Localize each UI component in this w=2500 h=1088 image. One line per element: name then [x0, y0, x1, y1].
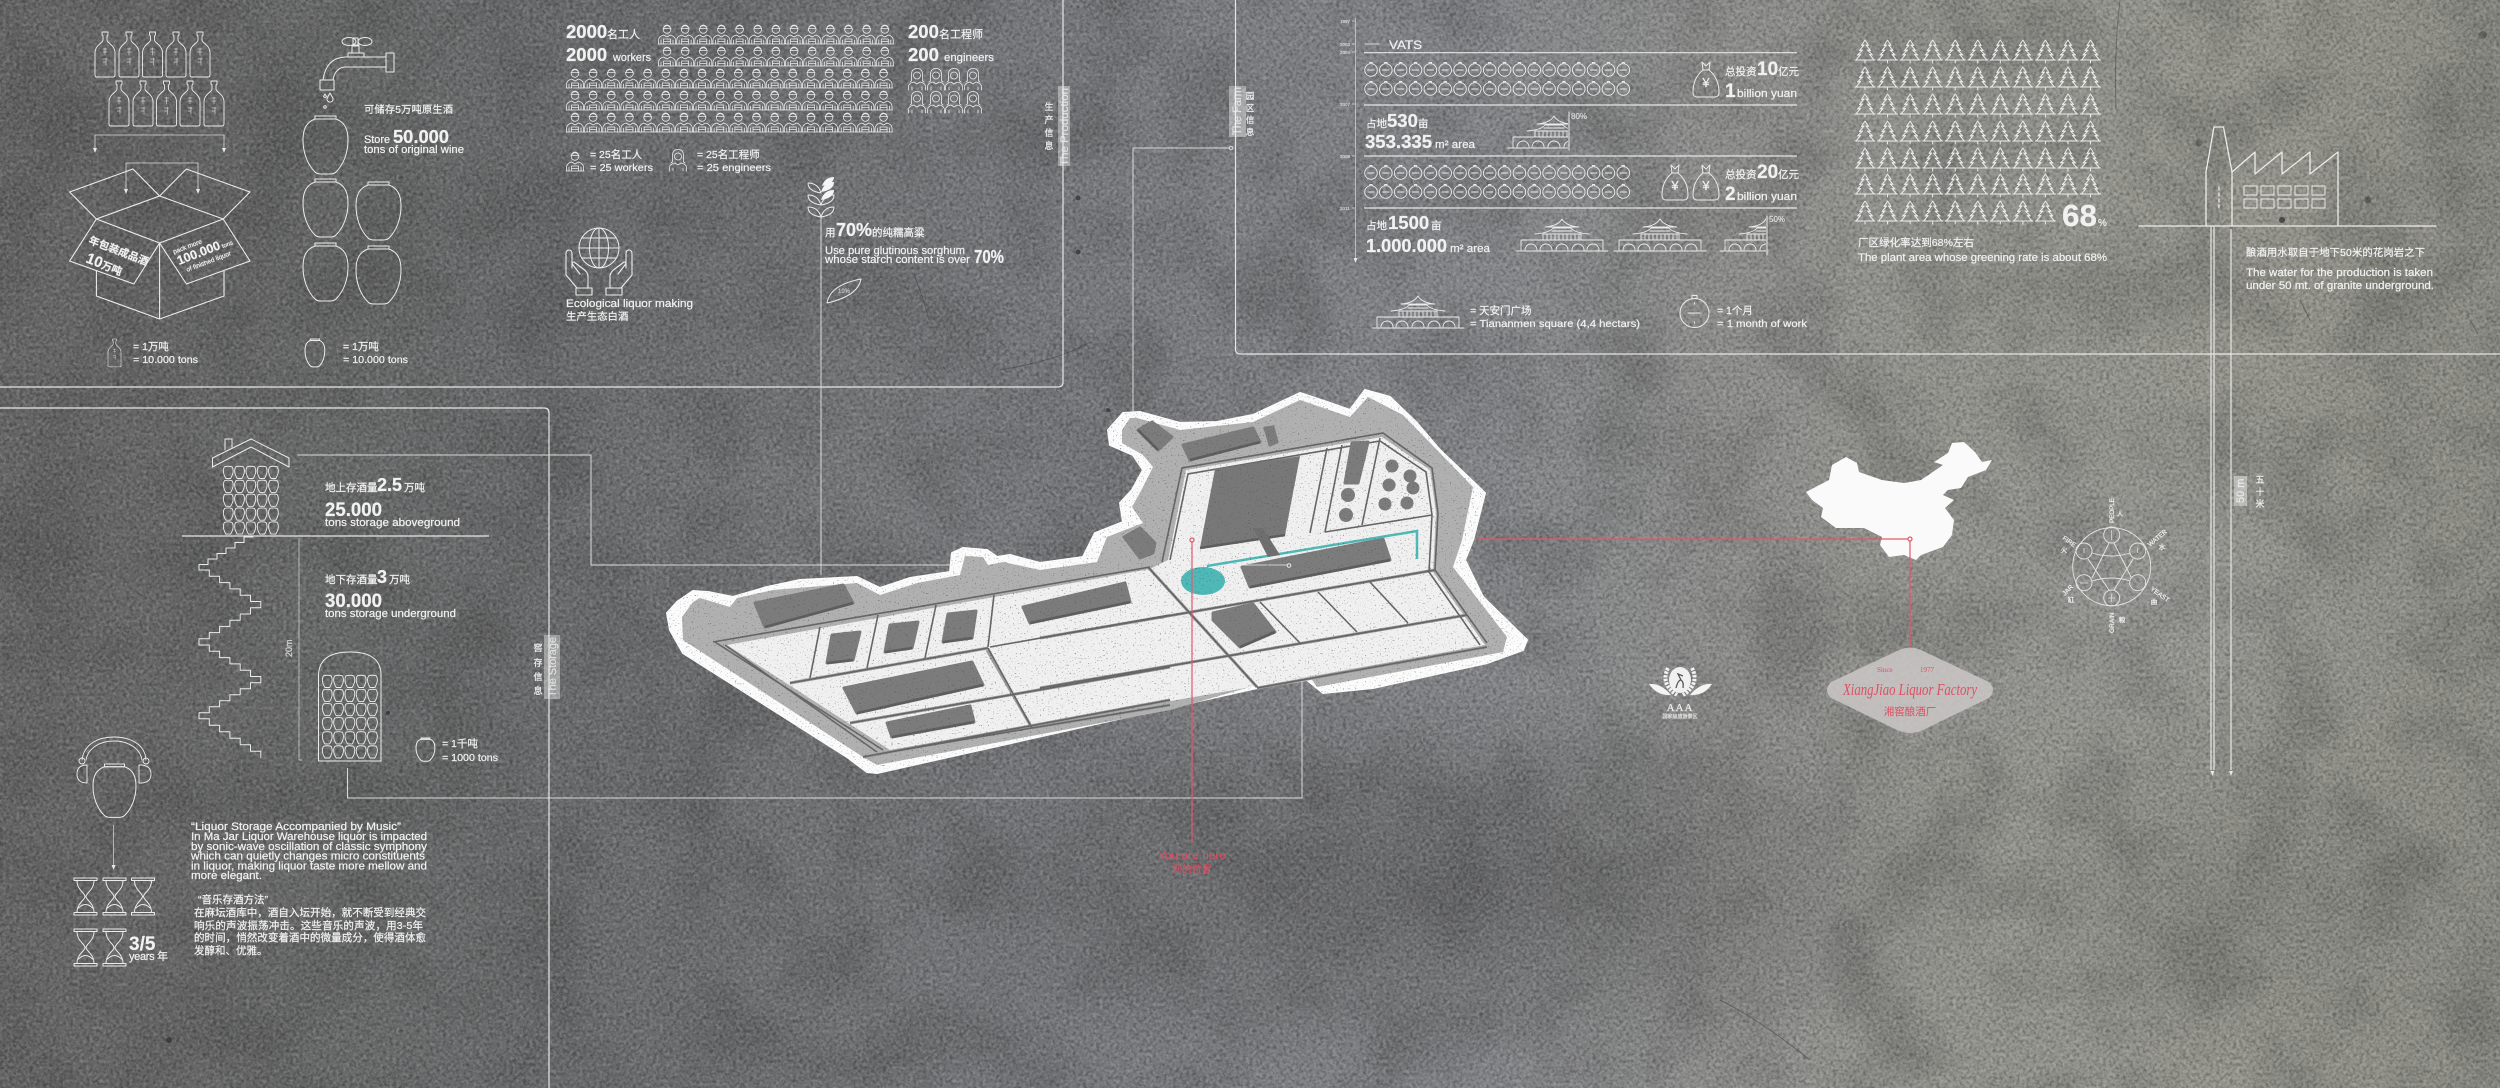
- panel: music storage: [74, 737, 428, 966]
- timeline axis: 2007: [1340, 102, 1351, 107]
- icon: two money bags: [1662, 165, 1719, 200]
- text: underground: tons storage underground: [325, 608, 456, 620]
- text: store 50.000: tons of original wine: [364, 144, 464, 156]
- text: music english: [190, 821, 428, 882]
- legend: bottle: = 1万吨: [133, 340, 169, 353]
- legend: jar: = 10.000 tons: [343, 354, 408, 366]
- timeline axis: 2003: [1340, 42, 1351, 47]
- text: vats: [1365, 38, 1422, 52]
- text: underground: 30.000: [325, 591, 382, 612]
- dimension: 20m: [284, 538, 302, 760]
- diagram: five elements wheel: WATER: [2147, 528, 2169, 549]
- text: sorghum 70%: 70%: [836, 220, 872, 240]
- ground line: [182, 535, 489, 537]
- map detail marker: [1242, 564, 1291, 567]
- tag: 50 m: [2234, 475, 2265, 509]
- tag: the storage: [533, 635, 560, 699]
- tag: the production: [1044, 86, 1071, 166]
- text: annual packing en: 100.000 tons: [175, 234, 234, 268]
- legend: month of work: = 1 month of work: [1717, 318, 1808, 330]
- text: music chinese: 发醇和、优雅。: [194, 944, 268, 957]
- legend: engineers: = 25 engineers: [697, 162, 771, 174]
- text: area 1500: 占地: [1366, 219, 1388, 232]
- icon: hourglasses: [74, 878, 154, 966]
- you are here marker: You are here: [1158, 850, 1226, 862]
- text: annual packing cn: [84, 234, 151, 279]
- legend: month of work: = 1个月: [1717, 305, 1753, 317]
- text: 2 billion: 2: [1725, 184, 1736, 205]
- text: 3/5 years: [129, 934, 168, 963]
- text: music chinese: [194, 893, 426, 957]
- red location connector: [1477, 537, 1912, 647]
- text: 1 billion: billion yuan: [1737, 88, 1797, 100]
- map buildings: [755, 422, 1420, 737]
- icon: tiananmen 80%: 80%: [1571, 112, 1587, 121]
- text: greening rate: 厂区绿化率达到68%左右: [1858, 236, 1974, 249]
- text: 200 engineers: 200: [908, 44, 939, 65]
- panel: workforce: [566, 21, 995, 174]
- diagram: five elements wheel: 粮: [2119, 615, 2126, 624]
- diagram: five elements wheel: GRAIN: [2109, 612, 2116, 633]
- text: 1 billion: 总投资: [1725, 65, 1756, 78]
- badge: AAA scenic area: AAA: [1667, 702, 1693, 714]
- panel: original wine storage: [303, 38, 464, 367]
- text: area 530: 亩: [1418, 117, 1428, 130]
- text: 2000 workers: 2000: [566, 21, 607, 42]
- tag: 50 m: 米: [2255, 498, 2265, 509]
- text: sorghum 70%: Use pure glutinous sorghum: [825, 245, 965, 257]
- text: 1 billion: [1725, 59, 1800, 102]
- diagram: five elements wheel: PEOPLE: [2109, 497, 2116, 523]
- icon: tiananmen 2.5: [1516, 215, 1812, 255]
- text: 1 billion: 1: [1725, 81, 1736, 102]
- arrow: to hourglasses: [112, 825, 116, 870]
- text: aboveground: 万吨: [404, 481, 425, 494]
- chart: engineer pictogram: [908, 68, 982, 113]
- legend: workers: = 25 workers: [590, 162, 653, 174]
- text: underground: 万吨: [389, 573, 410, 586]
- text: area 530: [1365, 110, 1476, 152]
- chart: trees 68 percent: [1855, 40, 2100, 224]
- dimension: 20m: 20m: [284, 639, 294, 657]
- icon: two money bags: ¥: [1701, 178, 1710, 193]
- legend: jar: = 1万吨: [343, 340, 379, 353]
- text: area 1500: 1.000.000: [1366, 235, 1447, 256]
- diagram: five elements wheel: 人: [2117, 510, 2124, 518]
- text: water source: The water for the production is taken: [2246, 267, 2433, 279]
- map plot area: [727, 437, 1485, 750]
- tag: the farm: 信: [1246, 115, 1255, 125]
- text: underground: 3: [377, 567, 387, 587]
- text: music english: which can quietly changes micro constituents: [190, 850, 426, 862]
- text: 200 engineers: 名工程师: [939, 27, 983, 41]
- text: music chinese: 在麻坛酒库中，酒自入坛开始，就不断受到经典交: [194, 906, 426, 919]
- legend: bottle: = 10.000 tons: [133, 354, 198, 366]
- text: aboveground: 25.000: [325, 500, 382, 521]
- legend: jar: [305, 339, 408, 367]
- diagram: five elements wheel: FIRE: [2061, 535, 2078, 550]
- text: 2000 workers: 名工人: [607, 27, 640, 41]
- map teal water: [1181, 531, 1417, 595]
- text: music english: by sonic-wave oscillation of classic symphony: [191, 841, 428, 853]
- legend: tiananmen: = Tiananmen square (4,4 hectars): [1470, 318, 1640, 330]
- badge: AAA scenic area: [1649, 667, 1712, 720]
- icon: leaf 10%: [827, 279, 861, 303]
- legend: 1000 tons: = 1000 tons: [442, 752, 498, 764]
- text: area 1500: [1366, 212, 1491, 256]
- tag: the production: 生: [1044, 101, 1054, 112]
- tag: the storage: 存: [533, 657, 543, 668]
- panel: storage: [182, 439, 498, 764]
- text: music chinese: 的时间，悄然改变着酒中的微量成分，使得酒体愈: [194, 931, 426, 944]
- text: 2000 workers: [566, 21, 651, 65]
- text: 3/5 years: years 年: [129, 949, 168, 963]
- text: area 1500: 1500: [1388, 212, 1429, 233]
- tag: the storage: 息: [533, 685, 543, 696]
- tag: the storage: The Storage: [547, 637, 559, 697]
- icon: money bag: ¥: [1701, 75, 1710, 90]
- tag: the farm: 园: [1246, 91, 1254, 101]
- text: water source: under 50 mt. of granite underground.: [2246, 280, 2434, 292]
- text: 68 percent: 68: [2062, 198, 2097, 233]
- text: 68 percent: %: [2098, 218, 2107, 229]
- text: music english: “Liquor Storage Accompanied by Music”: [191, 821, 401, 833]
- text: annual packing en: pack more: [172, 238, 203, 256]
- text: greening rate: [1858, 236, 2107, 264]
- legend: tiananmen: = 天安门广场: [1470, 304, 1532, 317]
- map ground: [682, 397, 1507, 765]
- text: 2 billion: [1725, 162, 1800, 205]
- icon: tiananmen 2.5: 50%: [1769, 215, 1785, 224]
- diagram: five elements wheel: 火: [2061, 547, 2068, 554]
- text: water source: [2246, 246, 2434, 292]
- tag: 50 m: 十: [2255, 486, 2265, 497]
- text: sorghum 70%: 70%: [974, 247, 1004, 267]
- arrow: water pipe: [2210, 226, 2233, 776]
- legend: bottle: [108, 339, 198, 367]
- tag: the production: The Production: [1059, 88, 1071, 166]
- text: store 50.000: 50.000: [393, 127, 449, 147]
- text: aboveground: 地上存酒量: [325, 481, 378, 494]
- legend: workers: [566, 148, 653, 174]
- diagram: five elements wheel: YEAST: [2149, 586, 2170, 604]
- text: underground: [325, 567, 456, 620]
- you are here marker: 您的位置: [1172, 863, 1212, 876]
- diagram: five elements wheel: JAR: [2061, 584, 2075, 597]
- icon: underground stairs: [199, 537, 261, 758]
- tag: the production: 信: [1044, 127, 1054, 138]
- icon: bottles: [95, 32, 224, 126]
- text: ecological liquor: 生产生态白酒: [566, 310, 628, 323]
- map bridge: [1253, 528, 1280, 557]
- tag: the farm: The Farm: [1230, 87, 1244, 135]
- timeline axis: 2004: [1340, 50, 1351, 55]
- icon: cellar with jars: [318, 652, 381, 761]
- diagram: five elements wheel: [2061, 497, 2170, 633]
- text: sorghum 70%: 的纯糯高粱: [872, 226, 925, 239]
- legend: engineers: = 25名工程师: [697, 148, 760, 161]
- icon: house with jars: [212, 439, 289, 534]
- text: 3/5 years: 3/5: [129, 934, 156, 955]
- tag: the farm: [1229, 86, 1255, 137]
- text: sorghum 70%: 用: [825, 227, 836, 239]
- text: 2 billion: billion yuan: [1737, 191, 1797, 203]
- tag: the farm: 息: [1246, 127, 1255, 137]
- text: annual packing en: of finished liquor: [186, 250, 233, 274]
- text: annual packing en: [172, 228, 237, 276]
- text: 2000 workers: workers: [612, 52, 651, 64]
- panel: the farm timeline: [1340, 18, 1812, 330]
- timeline axis: 1997: [1340, 19, 1351, 24]
- text: store 50.000: [364, 103, 464, 156]
- text: 1 billion: 10: [1757, 59, 1778, 80]
- badge: xiangjiao liquor factory: 湘窖酿酒厂: [1884, 705, 1936, 718]
- chart: months of work 1: [1365, 62, 1630, 95]
- badge: xiangjiao liquor factory: [1827, 648, 1993, 733]
- text: music english: more elegant.: [191, 870, 262, 882]
- icon: open box: [70, 169, 250, 319]
- text: store 50.000: Store: [364, 134, 390, 146]
- text: store 50.000: 可储存5万吨原生酒: [364, 103, 453, 116]
- text: aboveground: tons storage aboveground: [325, 517, 460, 529]
- text: ecological liquor: [566, 298, 693, 323]
- text: aboveground: [325, 475, 460, 529]
- text: area 1500: m² area: [1450, 243, 1491, 255]
- text: music chinese: 响乐的声波振荡冲击。这些音乐的声波，用3-5年: [194, 919, 423, 932]
- tag: 50 m: 50 m: [2235, 479, 2247, 503]
- icon: china map: [1806, 442, 1992, 560]
- text: 1 billion: 亿元: [1778, 65, 1800, 78]
- you are here marker: [1158, 538, 1226, 876]
- text: 200 engineers: [908, 21, 995, 65]
- text: area 530: 占地: [1366, 117, 1388, 130]
- text: area 530: 353.335: [1365, 131, 1432, 152]
- tag: the production: 产: [1044, 114, 1054, 125]
- text: annual packing cn: 年包装成品酒: [87, 234, 151, 269]
- icon: tiananmen 80%: [1508, 112, 1587, 150]
- map outline: [667, 390, 1527, 773]
- badge: xiangjiao liquor factory: 1977: [1920, 666, 1934, 674]
- tag: the farm: 区: [1246, 103, 1255, 113]
- text: area 530: 530: [1387, 110, 1418, 131]
- icon: factory: [2139, 127, 2436, 226]
- icon: tap: [320, 38, 394, 108]
- timeline axis: 2009: [1340, 154, 1351, 159]
- icon: two money bags: ¥: [1670, 178, 1679, 193]
- diagram: five elements wheel: 缸: [2068, 595, 2075, 604]
- map speckle: [660, 385, 1530, 780]
- icon: jars: [303, 116, 401, 304]
- timeline axis: [1340, 18, 1358, 263]
- icon: jar with headphones: [77, 737, 151, 817]
- row dividers: [1364, 53, 1797, 208]
- text: greening rate: The plant area whose greening rate is about 68%: [1858, 252, 2107, 264]
- map roads: [713, 433, 1487, 757]
- tag: the storage: 信: [533, 671, 543, 682]
- tag: the storage: 窖: [533, 642, 543, 653]
- text: area 1500: 亩: [1431, 219, 1442, 232]
- legend: workers: = 25名工人: [590, 148, 643, 161]
- chart: months of work 2: [1365, 166, 1630, 198]
- text: vats: VATS: [1389, 38, 1422, 52]
- text: ecological liquor: Ecological liquor making: [566, 298, 693, 310]
- text: 200 engineers: 200: [908, 21, 939, 42]
- legend: tiananmen: [1372, 296, 1640, 330]
- chart: worker pictogram: [566, 25, 894, 132]
- diagram: five elements wheel: 曲: [2151, 597, 2157, 606]
- legend: 1000 tons: = 1千吨: [442, 737, 478, 750]
- text: annual packing cn: 10万吨: [84, 250, 125, 279]
- text: sorghum 70%: [824, 220, 1004, 267]
- tag: 50 m: 五: [2255, 475, 2265, 485]
- legend: month of work: [1680, 296, 1808, 330]
- text: music english: in liquor, making liquor taste more mellow and: [191, 860, 427, 872]
- diagram: five elements wheel: 水: [2159, 542, 2166, 551]
- tag: the production: 息: [1044, 140, 1054, 151]
- badge: xiangjiao liquor factory: XiangJiao Liquor Factory: [1842, 680, 1977, 699]
- text: 2 billion: 总投资: [1725, 168, 1756, 181]
- text: 2 billion: 亿元: [1778, 168, 1800, 181]
- badge: xiangjiao liquor factory: Since: [1877, 666, 1893, 674]
- text: music chinese: “音乐存酒方法”: [198, 893, 268, 906]
- icon: wheat: [808, 177, 834, 217]
- text: area 530: m² area: [1435, 139, 1476, 151]
- icon: money bag: [1693, 62, 1719, 97]
- arrow: bottles into box: [93, 135, 226, 194]
- panel: packaging: [70, 32, 250, 367]
- text: 2000 workers: 2000: [566, 44, 607, 65]
- badge: AAA scenic area: 国家级旅游景区: [1662, 713, 1698, 720]
- isometric site map: [660, 385, 1530, 780]
- text: aboveground: 2.5: [377, 475, 402, 495]
- text: 200 engineers: engineers: [944, 52, 995, 64]
- timeline axis: 2011: [1340, 206, 1350, 211]
- text: water source: 酿酒用水取自于地下50米的花岗岩之下: [2246, 246, 2425, 259]
- icon: globe in hands: [566, 228, 632, 295]
- icon: leaf 10%: 10%: [838, 289, 851, 295]
- legend: 1000 tons: [416, 737, 498, 764]
- text: underground: 地下存酒量: [325, 573, 378, 586]
- text: music english: In Ma Jar Liquor Warehouse liquor is impacted: [191, 831, 427, 843]
- text: 2 billion: 20: [1757, 162, 1778, 183]
- legend: engineers: [670, 148, 771, 174]
- text: sorghum 70%: whose starch content is over: [824, 254, 970, 266]
